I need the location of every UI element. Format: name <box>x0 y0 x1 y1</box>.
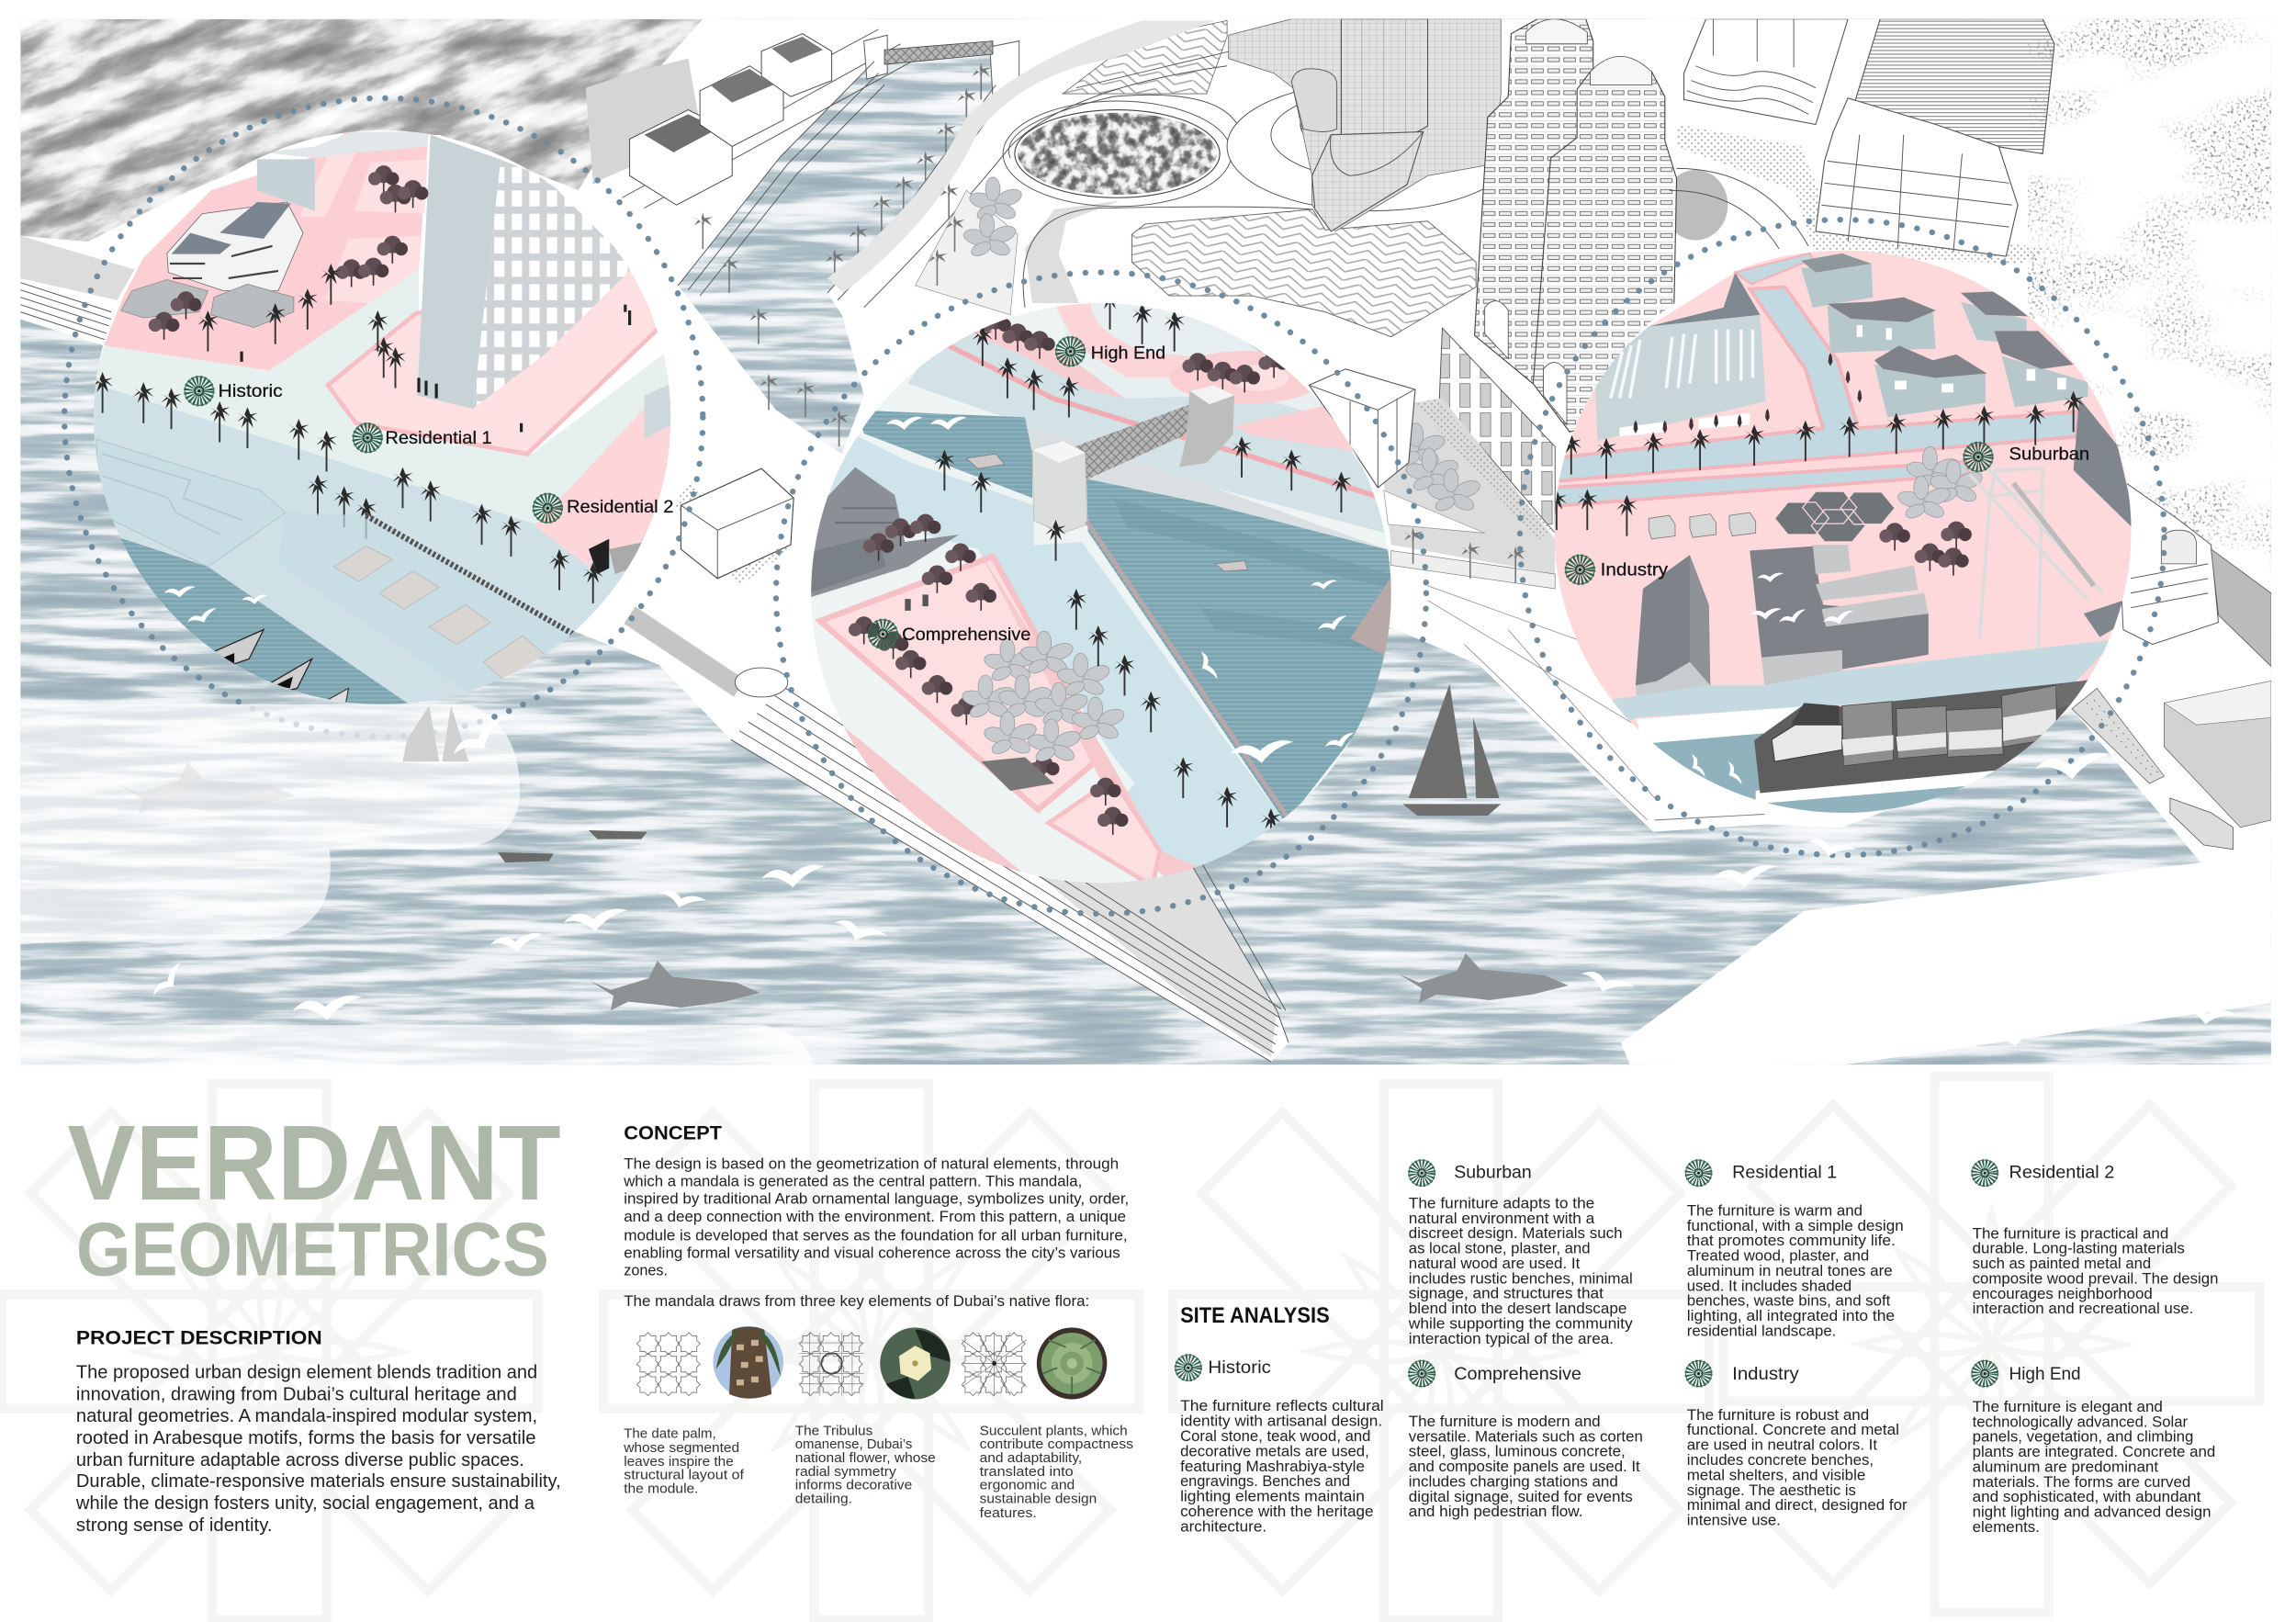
suburban houses <box>1801 264 1873 308</box>
zone: Residential 2: such as painted metal and <box>1973 1256 2151 1272</box>
shelters and hexagon canopies <box>1649 515 1675 539</box>
harbour water <box>88 527 411 706</box>
map location markers and labels: Industry <box>1601 561 1668 580</box>
zone: Residential 2: encourages neighborhood <box>1973 1286 2153 1302</box>
zone: Comprehensive <box>1409 1361 1643 1520</box>
zone: Industry: metal shelters, and visible <box>1687 1467 1865 1483</box>
cylindrical landmark tower <box>1229 19 1501 231</box>
zone: Comprehensive: versatile. Materials such as corten <box>1409 1428 1643 1445</box>
concept text: The design is based on the geometrization of natural elements, through <box>624 1155 1119 1172</box>
zone: Industry: are used in neutral colors. It <box>1687 1436 1877 1453</box>
zone: Historic <box>1176 1355 1384 1535</box>
concept text: which a mandala is generated as the central pattern. This mandala, <box>623 1173 1082 1189</box>
zone: Suburban: signage, and structures that <box>1409 1286 1604 1302</box>
zone: Residential 1: residential landscape. <box>1687 1323 1836 1339</box>
pink strip <box>535 389 673 567</box>
ground tint <box>88 125 681 704</box>
zone: Historic: engravings. Benches and <box>1180 1473 1350 1490</box>
zone: Suburban: Suburban <box>1454 1163 1532 1183</box>
small motorboats <box>498 830 647 862</box>
project description: rooted in Arabesque motifs, forms the basis for versatile <box>76 1428 536 1448</box>
flora captions: sustainable design <box>980 1492 1097 1507</box>
zone: Comprehensive: includes charging stations and <box>1409 1474 1618 1491</box>
zone: Historic: identity with artisanal design. <box>1180 1414 1382 1430</box>
zone: Historic: Historic <box>1208 1357 1271 1378</box>
zone: Comprehensive: Comprehensive <box>1454 1364 1581 1384</box>
platforms <box>334 546 546 682</box>
twin residential towers and podium <box>1439 19 1677 533</box>
flora captions: omanense, Dubai’s <box>795 1436 912 1452</box>
project description: natural geometries. A mandala-inspired modular system, <box>76 1406 537 1426</box>
small pavilion between circles <box>681 468 793 579</box>
zone: Comprehensive: The furniture is modern and <box>1409 1414 1601 1430</box>
date palm photo <box>713 1326 783 1399</box>
zone: High End: night lighting and advanced design <box>1973 1504 2212 1521</box>
zone: Residential 2 <box>1972 1160 2218 1317</box>
zone: High End: technologically advanced. Solar <box>1973 1414 2189 1430</box>
map location markers and labels: Suburban <box>2009 445 2089 465</box>
zone: Comprehensive: and high pedestrian flow. <box>1409 1504 1583 1520</box>
canal edge walkways and palms <box>678 62 1010 446</box>
project description: while the design fosters unity, social engagement, and a <box>75 1493 535 1514</box>
flora captions: whose segmented <box>623 1440 739 1456</box>
zone: Suburban <box>1408 1160 1634 1347</box>
promenade palms <box>934 449 955 490</box>
circular garden <box>1010 103 1728 240</box>
project description <box>75 1327 561 1536</box>
zone: Historic: coherence with the heritage <box>1180 1504 1374 1520</box>
warehouses <box>1636 555 1710 700</box>
light path <box>94 269 670 525</box>
flora captions: Succulent plants, which <box>980 1424 1128 1439</box>
project description: strong sense of identity. <box>76 1515 273 1536</box>
map location markers and labels: High End <box>1091 344 1165 364</box>
flora captions: features. <box>980 1505 1037 1521</box>
site analysis heading: SITE ANALYSIS <box>1180 1303 1330 1328</box>
zone: Historic: architecture. <box>1180 1518 1266 1535</box>
upper pink gardens <box>972 322 1124 399</box>
title: VERDANT <box>67 1103 561 1222</box>
plaza pink <box>104 131 429 370</box>
residential plot <box>328 266 658 454</box>
factory <box>1594 315 1766 441</box>
flora inspiration row <box>636 1326 1107 1399</box>
central mixed-use zone circle <box>805 278 1406 889</box>
bridge and towers <box>1075 399 1214 479</box>
flora captions: ergonomic and <box>980 1478 1075 1493</box>
zone: Residential 1: benches, waste bins, and soft <box>1687 1293 1891 1310</box>
concept text: enabling formal versatility and visual coherence across the city’s various <box>624 1245 1120 1262</box>
concept text: The mandala draws from three key elements of Dubai’s native flora: <box>624 1293 1089 1310</box>
flora captions: contribute compactness <box>980 1436 1133 1452</box>
dark entrance canopy <box>589 539 609 574</box>
zone: Residential 1: Residential 1 <box>1732 1163 1837 1183</box>
sharks <box>118 762 1569 1010</box>
promenade row houses <box>586 29 922 208</box>
zone: Suburban: natural wood are used. It <box>1409 1256 1581 1272</box>
flora captions: national flower, whose <box>795 1450 936 1466</box>
land mass <box>20 19 2271 1064</box>
left coast band <box>20 236 135 340</box>
star lattice pattern 1 <box>636 1333 700 1396</box>
zone: Residential 1: lighting, all integrated into the <box>1687 1308 1895 1324</box>
city fabric texture, top left <box>20 18 703 242</box>
zone: Residential 2: interaction and recreational use. <box>1973 1301 2193 1317</box>
historic buildings <box>257 159 315 211</box>
curved main street <box>1558 287 2077 481</box>
flock of gulls <box>148 718 2235 1046</box>
street palms <box>1561 434 1581 475</box>
blue promenade <box>978 542 1286 872</box>
zone: High End: and sophisticated, with abundant <box>1973 1489 2201 1505</box>
zone: Residential 1: used. It includes shaded <box>1687 1278 1851 1294</box>
flora captions: leaves inspire the <box>624 1454 734 1470</box>
zone: Historic: lighting elements maintain <box>1180 1489 1365 1505</box>
radial star pattern 3 <box>962 1333 1027 1396</box>
zone: Suburban: as local stone, plaster, and <box>1409 1241 1591 1257</box>
zone: Suburban: blend into the desert landscape <box>1409 1301 1626 1317</box>
zone: Residential 1 <box>1685 1160 1904 1339</box>
zone: Suburban: natural environment with a <box>1409 1211 1595 1227</box>
zone: Residential 2: Residential 2 <box>2009 1163 2114 1183</box>
moored boats <box>214 630 264 666</box>
promenade palms <box>92 372 113 413</box>
flora captions: the module. <box>624 1481 699 1497</box>
zone: Suburban: The furniture adapts to the <box>1409 1195 1594 1211</box>
zone: Comprehensive: and composite panels are used. It <box>1409 1459 1640 1475</box>
urban waterfront axonometric map <box>0 0 2271 1064</box>
zone: Residential 2: composite wood prevail. The design <box>1973 1270 2218 1287</box>
concept text: inspired by traditional Arab ornamental language, symbolizes unity, order, <box>624 1191 1129 1208</box>
succulent photo <box>1037 1327 1107 1399</box>
garden west of plaza <box>915 177 1024 315</box>
water texture <box>20 19 2271 1064</box>
map location markers and labels: Residential 1 <box>385 429 492 448</box>
plaza trees <box>1879 523 1910 551</box>
concept text: CONCEPT <box>624 1121 722 1143</box>
promenade blue <box>91 372 673 704</box>
zone: Industry: signage. The aesthetic is <box>1687 1482 1856 1499</box>
sailboats <box>402 684 1501 816</box>
zone: High End: plants are integrated. Concrete and <box>1973 1444 2215 1460</box>
zone: High End: The furniture is elegant and <box>1973 1399 2163 1415</box>
concept text: and a deep connection with the environment. From this pattern, a unique <box>624 1209 1126 1225</box>
zone: Residential 1: The furniture is warm and <box>1687 1202 1863 1219</box>
map location markers and labels: Historic <box>219 382 283 401</box>
white fog over water <box>20 704 813 1064</box>
zone: Residential 1: Treated wood, plaster, and <box>1687 1247 1869 1264</box>
zone: High End: aluminum are predominant <box>1973 1459 2159 1476</box>
project description: urban furniture adaptable across diverse public spaces. <box>76 1450 524 1470</box>
zone: Historic: decorative metals are used, <box>1180 1443 1369 1459</box>
map location markers and labels: Residential 2 <box>567 498 673 517</box>
project description: Durable, climate-responsive materials ensure sustainability, <box>76 1471 561 1492</box>
industrial and suburban zone circle <box>1537 234 2153 820</box>
zone: Suburban: while supporting the community <box>1408 1315 1634 1332</box>
plaza roads and herringbone paving <box>827 20 1520 337</box>
grid star pattern 2 <box>799 1333 864 1396</box>
zone: Historic: The furniture reflects cultural <box>1180 1398 1384 1414</box>
flora captions: radial symmetry <box>795 1464 896 1480</box>
channel water <box>857 410 1399 823</box>
project description: PROJECT DESCRIPTION <box>76 1327 322 1349</box>
second street <box>1549 462 1969 506</box>
roads east of central circle <box>1391 527 1764 820</box>
zone: Industry: The furniture is robust and <box>1687 1407 1869 1424</box>
zone: Industry: functional. Concrete and metal <box>1687 1422 1899 1438</box>
zone: Residential 2: The furniture is practical and <box>1973 1225 2168 1242</box>
map location markers and labels: Comprehensive <box>902 625 1030 645</box>
seawall <box>278 513 579 703</box>
zone: Industry: includes concrete benches, <box>1687 1452 1874 1469</box>
background mandala watermark <box>2 1076 2259 1619</box>
flora captions: The Tribulus <box>795 1424 872 1439</box>
zone: Residential 1: that promotes community life. <box>1687 1233 1896 1249</box>
title <box>67 1103 561 1292</box>
quay and water <box>1608 639 2117 727</box>
zone: High End: High End <box>2009 1364 2081 1384</box>
zone: High End <box>1972 1361 2215 1536</box>
grey end building <box>2074 399 2138 533</box>
eastern quay buildings <box>2072 476 2271 850</box>
stepped pier <box>630 615 1289 1062</box>
project description: The proposed urban design element blends tradition and <box>76 1362 537 1382</box>
container ship <box>1754 680 2092 804</box>
foliage canopy <box>983 638 1039 683</box>
zone: High End: elements. <box>1973 1519 2040 1536</box>
flora captions: translated into <box>980 1464 1074 1480</box>
zone: Historic: featuring Mashrabiya-style <box>1180 1459 1365 1475</box>
concept text: zones. <box>624 1263 668 1279</box>
project description: innovation, drawing from Dubai’s cultural heritage and <box>76 1384 517 1404</box>
left mixed land <box>810 549 1135 889</box>
slab tower <box>473 160 634 409</box>
upper pale and road bands <box>1054 303 1406 498</box>
waterfront mid-rise buildings <box>1684 19 2054 256</box>
zone: Residential 1: functional, with a simple design <box>1687 1218 1904 1234</box>
footbridge over canal <box>864 35 1019 96</box>
zone: Suburban: discreet design. Materials such <box>1409 1225 1623 1242</box>
plaza trees and people <box>368 165 399 193</box>
zone: High End: panels, vegetation, and climbing <box>1973 1429 2193 1446</box>
plaza trees <box>849 616 879 645</box>
zone: Residential 2: durable. Long-lasting materials <box>1973 1241 2185 1257</box>
ground <box>1554 251 2132 813</box>
map location markers and labels <box>185 337 2089 648</box>
historic and residential zone circle <box>88 125 681 706</box>
channel edge <box>1086 522 1291 823</box>
zone: Industry <box>1685 1361 1908 1528</box>
flora captions: The date palm, <box>624 1426 716 1442</box>
flora captions: and adaptability, <box>980 1450 1082 1466</box>
flora captions <box>623 1424 1133 1521</box>
dark heritage building <box>810 467 959 598</box>
pavilion beside central circle <box>1309 369 1415 488</box>
flora captions: structural layout of <box>624 1467 745 1482</box>
zone: Comprehensive: steel, glass, luminous concrete, <box>1409 1444 1626 1460</box>
zone: Historic: Coral stone, teak wood, and <box>1180 1428 1370 1445</box>
zone: Suburban: includes rustic benches, minimal <box>1409 1270 1633 1287</box>
base <box>811 303 1391 883</box>
concept text: module is developed that serves as the foundation for all urban furniture, <box>624 1227 1128 1244</box>
desert sand speckle <box>2028 19 2271 576</box>
zone: Residential 1: aluminum in neutral tones are <box>1687 1263 1893 1279</box>
pergolas <box>121 280 208 318</box>
zone: Industry: Industry <box>1732 1364 1799 1384</box>
dotted zone outlines <box>64 98 2165 914</box>
zone: Industry: minimal and direct, designed for <box>1687 1497 1908 1514</box>
stippled paving and road near towers <box>673 125 2050 586</box>
flora captions: informs decorative <box>795 1478 912 1493</box>
flora captions: detailing. <box>795 1492 852 1507</box>
title: GEOMETRICS <box>76 1207 549 1292</box>
zone: Suburban: interaction typical of the area. <box>1409 1331 1614 1347</box>
zone: High End: materials. The forms are curved <box>1973 1474 2190 1491</box>
concept text <box>623 1121 1129 1310</box>
zone: Comprehensive: digital signage, suited for events <box>1409 1489 1633 1505</box>
birds and boats <box>1230 740 1293 763</box>
tribulus flower photo <box>880 1327 951 1399</box>
gantry crane <box>1969 466 2103 662</box>
zone: Industry: intensive use. <box>1687 1512 1781 1528</box>
